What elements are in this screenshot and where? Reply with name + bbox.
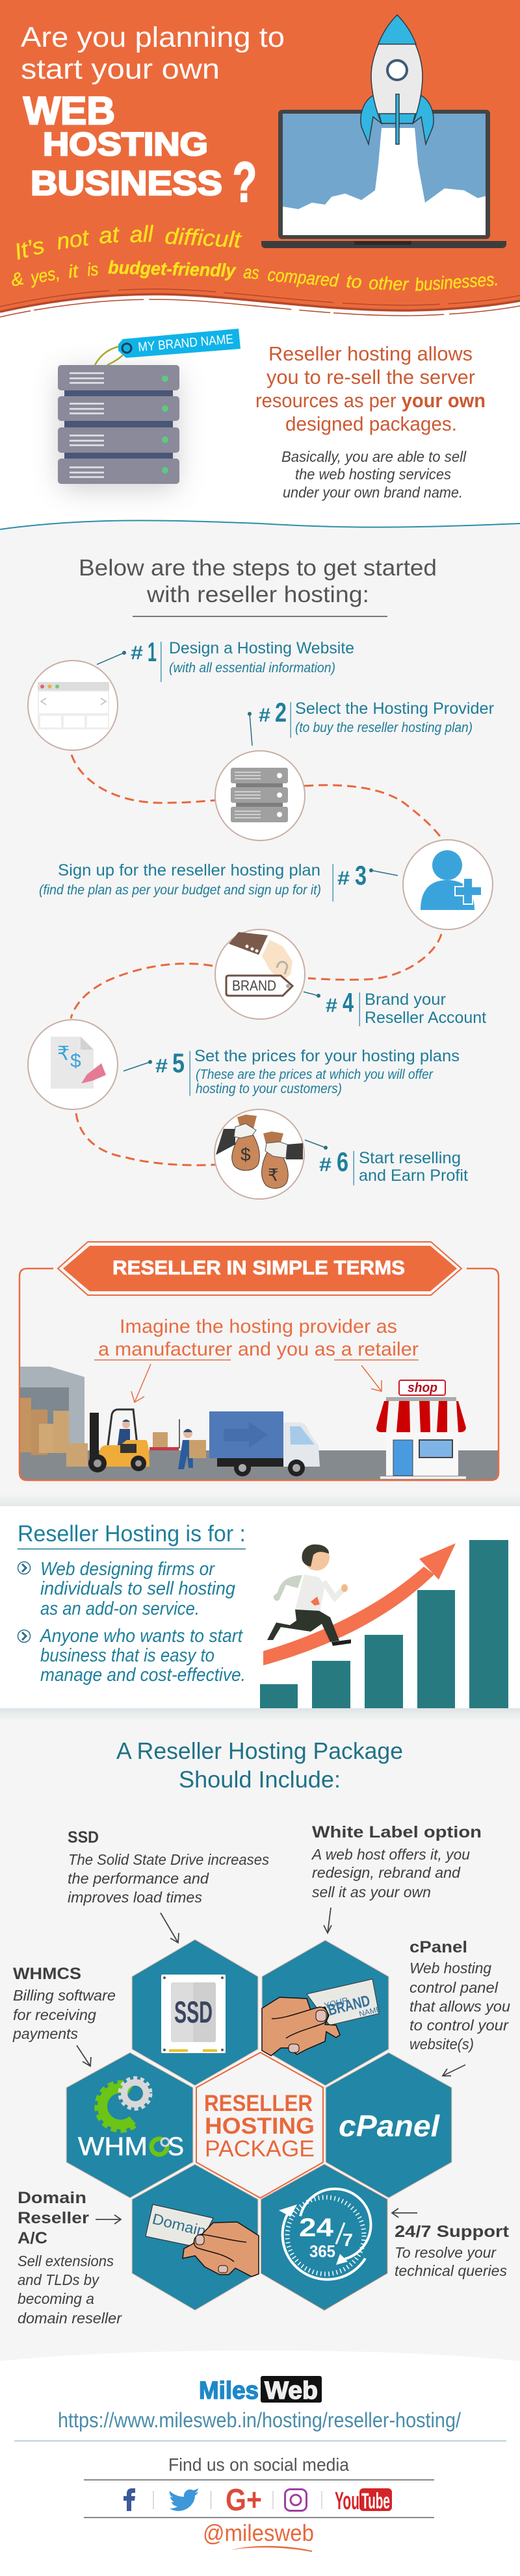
text: reseller hosting definition: resources as per your own	[255, 389, 486, 412]
tagline: budget-friendly: it	[67, 260, 80, 282]
text: white label feature: White Label option	[312, 1823, 482, 1841]
hexagon: center title: PACKAGE	[205, 2136, 315, 2162]
text	[194, 1047, 460, 1096]
icon: price document circle	[28, 1020, 118, 1109]
text: cPanel feature: Web hosting	[410, 1960, 491, 1976]
heading: package: A Reseller Hosting Package	[116, 1737, 403, 1764]
icon: youtube: You	[335, 2488, 359, 2515]
number: #	[337, 868, 350, 889]
icon: hosting server circle	[215, 751, 305, 840]
heading: steps	[79, 555, 437, 617]
text: WHMCS feature: Billing software	[13, 1987, 116, 2004]
text: support feature: To resolve your	[395, 2244, 497, 2261]
number: 6	[337, 1146, 348, 1177]
text: cPanel feature: control panel	[410, 1979, 499, 1996]
text: reseller hosting definition: designed packages.	[285, 412, 457, 435]
hexagon: SSD	[132, 1939, 258, 2086]
text: basically: under your own brand name.	[283, 484, 463, 501]
panel: footer	[0, 2351, 520, 2576]
panel: reseller hosting is for	[0, 1494, 520, 1708]
bullet: web designers: as an add-on service.	[40, 1598, 200, 1619]
icon: brand tag: MY BRAND NAME	[138, 332, 234, 355]
number	[259, 697, 287, 727]
icon: price document circle: ₹	[57, 1043, 70, 1065]
tagline: budget-friendly	[9, 257, 499, 295]
number	[155, 1048, 185, 1078]
logo: MilesWeb	[199, 2376, 322, 2405]
text: SSD feature: the performance and	[68, 1870, 209, 1887]
banner	[58, 1242, 462, 1295]
text: cPanel feature: website(s)	[410, 2036, 474, 2052]
bullet: web designers: individuals to sell hosting	[40, 1578, 235, 1599]
icon: website circle	[28, 661, 118, 750]
heading: package	[0, 1708, 520, 1793]
icon: youtube: Tube	[361, 2489, 390, 2514]
step 4	[215, 929, 486, 1027]
panel: grey package section background	[0, 1708, 520, 2364]
text: domain reseller feature: and TLDs by	[18, 2271, 99, 2288]
text: Start reselling	[359, 1149, 461, 1167]
text: domain reseller feature: A/C	[18, 2229, 47, 2247]
leader line	[305, 1140, 326, 1148]
hexagon: center title: HOSTING	[205, 2114, 315, 2139]
text: hosting to your customers)	[196, 1081, 342, 1096]
text: support feature	[395, 2223, 510, 2279]
text: basically: Basically, you are able to sell	[281, 448, 467, 465]
text: cPanel feature: to control your	[410, 2017, 509, 2034]
number: #	[155, 1055, 168, 1077]
text	[39, 861, 321, 898]
chart: hexagon package	[66, 1939, 452, 2310]
bullet: anyone: Anyone who wants to start	[39, 1626, 244, 1647]
arrow: to warehouse	[131, 1364, 151, 1402]
leader line	[304, 992, 318, 996]
text: imagine	[94, 1316, 419, 1360]
icon: brand hand and tag circle	[215, 929, 305, 1019]
icon: google plus: G+	[226, 2483, 262, 2518]
hexagon: white label: NAME	[358, 2004, 382, 2019]
icon: instagram	[285, 2489, 307, 2511]
number: 1	[148, 637, 157, 667]
number: 3	[355, 860, 367, 890]
title: web hosting business: ?	[233, 151, 257, 214]
text: support feature: technical queries	[395, 2262, 507, 2279]
icon: forklift	[88, 1409, 150, 1472]
icon: shop	[376, 1380, 466, 1479]
hexagon: cPanel	[326, 2052, 452, 2198]
step 2	[215, 697, 494, 840]
logo: MilesWeb: Web	[265, 2377, 318, 2405]
step 6	[214, 1109, 468, 1199]
tagline: budget-friendly: is	[86, 259, 99, 280]
text: WHMCS feature	[12, 1965, 116, 2042]
tagline: not difficult: It’s	[12, 233, 47, 265]
icon: rocket	[361, 15, 434, 144]
text: domain reseller feature: becoming a	[18, 2290, 94, 2307]
dashed route between steps	[71, 755, 443, 1165]
hexagon: WHMCS: WHM	[78, 2132, 148, 2161]
bullet: anyone: business that is easy to	[40, 1645, 214, 1666]
icon: money bags circle	[214, 1109, 304, 1199]
chart: growth bars	[260, 1540, 508, 1708]
hexagon: WHMCS	[66, 2052, 193, 2198]
bullet: anyone	[18, 1626, 246, 1686]
tagline: budget-friendly: as	[243, 262, 260, 283]
text: support feature: 24/7 Support	[395, 2223, 510, 2241]
icon: twitter	[170, 2488, 198, 2511]
bullet: web designers: Web designing firms or	[40, 1559, 215, 1580]
text: (with all essential information)	[169, 661, 335, 676]
text	[169, 639, 354, 676]
number: #	[326, 995, 337, 1017]
hexagon: domain	[132, 2164, 259, 2310]
text: Brand your	[365, 991, 446, 1009]
number: 5	[172, 1048, 185, 1078]
title: web hosting business: HOSTING	[43, 126, 208, 162]
text: domain reseller feature: Reseller	[18, 2209, 89, 2227]
tagline: not difficult: at	[98, 221, 121, 249]
tagline: budget-friendly: &	[9, 268, 25, 290]
hexagon: 24/7 support: 24	[299, 2214, 334, 2242]
leader line	[371, 870, 398, 876]
number: #	[319, 1154, 332, 1176]
hexagon: white label: YOUR	[323, 1995, 349, 2010]
tagline: not difficult: not	[55, 225, 91, 255]
icon: brand hand and tag circle: BRAND	[232, 978, 276, 994]
panel: orange header	[0, 0, 520, 317]
text: WHMCS feature: WHMCS	[13, 1965, 81, 1983]
hexagon: domain: Domain	[151, 2210, 208, 2240]
text: SSD feature: SSD	[68, 1828, 99, 1847]
text: basically	[281, 448, 467, 501]
tagline: budget-friendly: budget-friendly	[108, 257, 237, 281]
heading: Reseller Hosting is for :	[18, 1521, 246, 1547]
text: domain reseller feature: Domain	[18, 2189, 86, 2207]
hexagon: SSD: SSD	[174, 1995, 213, 2029]
hexagon: white label	[262, 1940, 389, 2086]
text: white label feature: redesign, rebrand and	[312, 1864, 461, 1881]
text: white label feature: sell it as your own	[312, 1884, 431, 1900]
text: domain reseller feature: domain reseller	[18, 2310, 122, 2327]
ground	[20, 1450, 498, 1480]
text: domain reseller feature	[18, 2189, 122, 2327]
tagline: not difficult	[12, 221, 242, 265]
title: planning line: Are you planning to	[21, 21, 285, 53]
text: SSD feature: The Solid State Drive increases	[68, 1851, 269, 1868]
number: 2	[275, 697, 287, 727]
text: Design a Hosting Website	[169, 639, 354, 657]
arrows: feature pointers	[77, 1908, 465, 2224]
number	[337, 860, 367, 890]
icon: worker	[178, 1429, 206, 1469]
leader line	[124, 1062, 150, 1071]
frame	[20, 1269, 499, 1480]
icon: facebook	[124, 2488, 135, 2511]
text: cPanel feature: cPanel	[410, 1938, 467, 1956]
icons: social media	[124, 2483, 392, 2518]
tagline: budget-friendly: compared	[266, 264, 340, 291]
hexagon: cPanel: cPanel	[339, 2109, 440, 2143]
icon: shop: shop	[408, 1381, 437, 1395]
leader line	[250, 714, 252, 746]
text: domain reseller feature: Sell extensions	[18, 2253, 114, 2269]
icon: money bags circle: $	[240, 1144, 251, 1165]
heading: package: Should Include:	[179, 1766, 341, 1793]
text: cPanel feature: that allows you	[410, 1998, 510, 2015]
hexagon: WHMCS: S	[168, 2132, 184, 2161]
number	[319, 1146, 348, 1177]
hexagon: 24/7 support: 7	[343, 2230, 353, 2250]
icon: server stack	[58, 365, 179, 484]
text: white label feature: A web host offers it, you	[311, 1846, 470, 1863]
text: white label feature	[311, 1823, 482, 1900]
number	[131, 637, 157, 667]
text: imagine: a manufacturer and you as a retailer	[98, 1339, 419, 1360]
text	[295, 700, 494, 735]
number	[326, 987, 354, 1018]
logo: MilesWeb: Miles	[199, 2377, 259, 2405]
panel: grey steps section background	[0, 520, 520, 1506]
text: Sign up for the reseller hosting plan	[58, 861, 320, 879]
icon: delivery truck	[209, 1411, 320, 1476]
number: #	[259, 705, 270, 726]
link: url: https://www.milesweb.in/hosting/reseller-hosting/	[58, 2408, 461, 2432]
tagline: budget-friendly: yes,	[28, 263, 61, 288]
hexagon: center title	[196, 2052, 323, 2198]
bullet: web designers	[18, 1559, 235, 1619]
step 1	[28, 637, 354, 750]
text	[359, 1149, 468, 1185]
icon: tag string	[95, 346, 127, 365]
text: SSD feature	[68, 1828, 269, 1906]
arrow: to shop	[361, 1365, 382, 1391]
text: (to buy the reseller hosting plan)	[295, 720, 473, 735]
text: (find the plan as per your budget and sign up for it)	[39, 883, 321, 898]
title: web hosting business	[23, 89, 257, 214]
text: (These are the prices at which you will offer	[196, 1067, 434, 1082]
text: reseller hosting definition: you to re-sell the server	[266, 366, 475, 388]
tagline: not difficult: all	[129, 221, 154, 247]
text: and Earn Profit	[359, 1167, 468, 1185]
step 5	[28, 1020, 460, 1109]
text: find us: Find us on social media	[168, 2455, 349, 2475]
icon: money bags circle: ₹	[268, 1165, 279, 1185]
text: reseller hosting definition: Reseller hosting allows	[268, 342, 473, 365]
icon: server with brand tag	[58, 329, 240, 487]
icon: laptop	[261, 110, 506, 248]
tagline: budget-friendly: other	[369, 273, 410, 294]
text: WHMCS feature: payments	[12, 2025, 78, 2042]
text: Select the Hosting Provider	[295, 700, 494, 718]
icon: warehouse	[20, 1367, 88, 1467]
text: WHMCS feature: for receiving	[13, 2006, 96, 2023]
text: Reseller Account	[365, 1009, 486, 1027]
icon: add user circle	[403, 840, 493, 929]
icon: running man	[267, 1545, 351, 1646]
panel: reseller in simple terms	[20, 1242, 499, 1480]
icon: pallet jack and box	[150, 1419, 180, 1450]
hexagon: center title: RESELLER	[204, 2091, 313, 2116]
title: web hosting business: BUSINESS	[31, 164, 222, 203]
text: cPanel feature	[410, 1938, 510, 2052]
title: web hosting business: WEB	[23, 89, 115, 133]
tagline: budget-friendly: businesses.	[414, 269, 499, 295]
hexagon: 24/7 support: 365	[309, 2241, 335, 2261]
tagline: budget-friendly: to	[346, 271, 363, 292]
number: 4	[343, 987, 354, 1018]
hexagon: white label: BRAND	[326, 1992, 372, 2019]
text: handle: @milesweb	[203, 2519, 314, 2546]
banner: RESELLER IN SIMPLE TERMS	[112, 1256, 405, 1279]
text	[365, 991, 486, 1027]
leader line	[97, 653, 124, 664]
number: #	[131, 642, 143, 664]
title: planning line: start your own	[21, 53, 220, 85]
icon: brand tag	[118, 329, 240, 358]
text: reseller hosting definition	[255, 342, 486, 435]
tagline: not difficult: difficult	[164, 223, 242, 253]
text: basically: the web hosting services	[295, 466, 451, 483]
text: imagine: Imagine the hosting provider as	[120, 1316, 397, 1337]
icon: price document circle: $	[70, 1050, 81, 1072]
hexagon: 24/7 support	[261, 2164, 387, 2310]
step 3	[39, 840, 493, 929]
bullet: anyone: manage and cost-effective.	[40, 1665, 246, 1686]
text: Set the prices for your hosting plans	[194, 1047, 460, 1065]
arrow: growth	[263, 1543, 456, 1665]
heading: steps: Below are the steps to get started	[79, 555, 437, 581]
title: planning line	[21, 21, 285, 85]
text: SSD feature: improves load times	[68, 1889, 202, 1906]
heading: steps: with reseller hosting:	[146, 582, 369, 607]
